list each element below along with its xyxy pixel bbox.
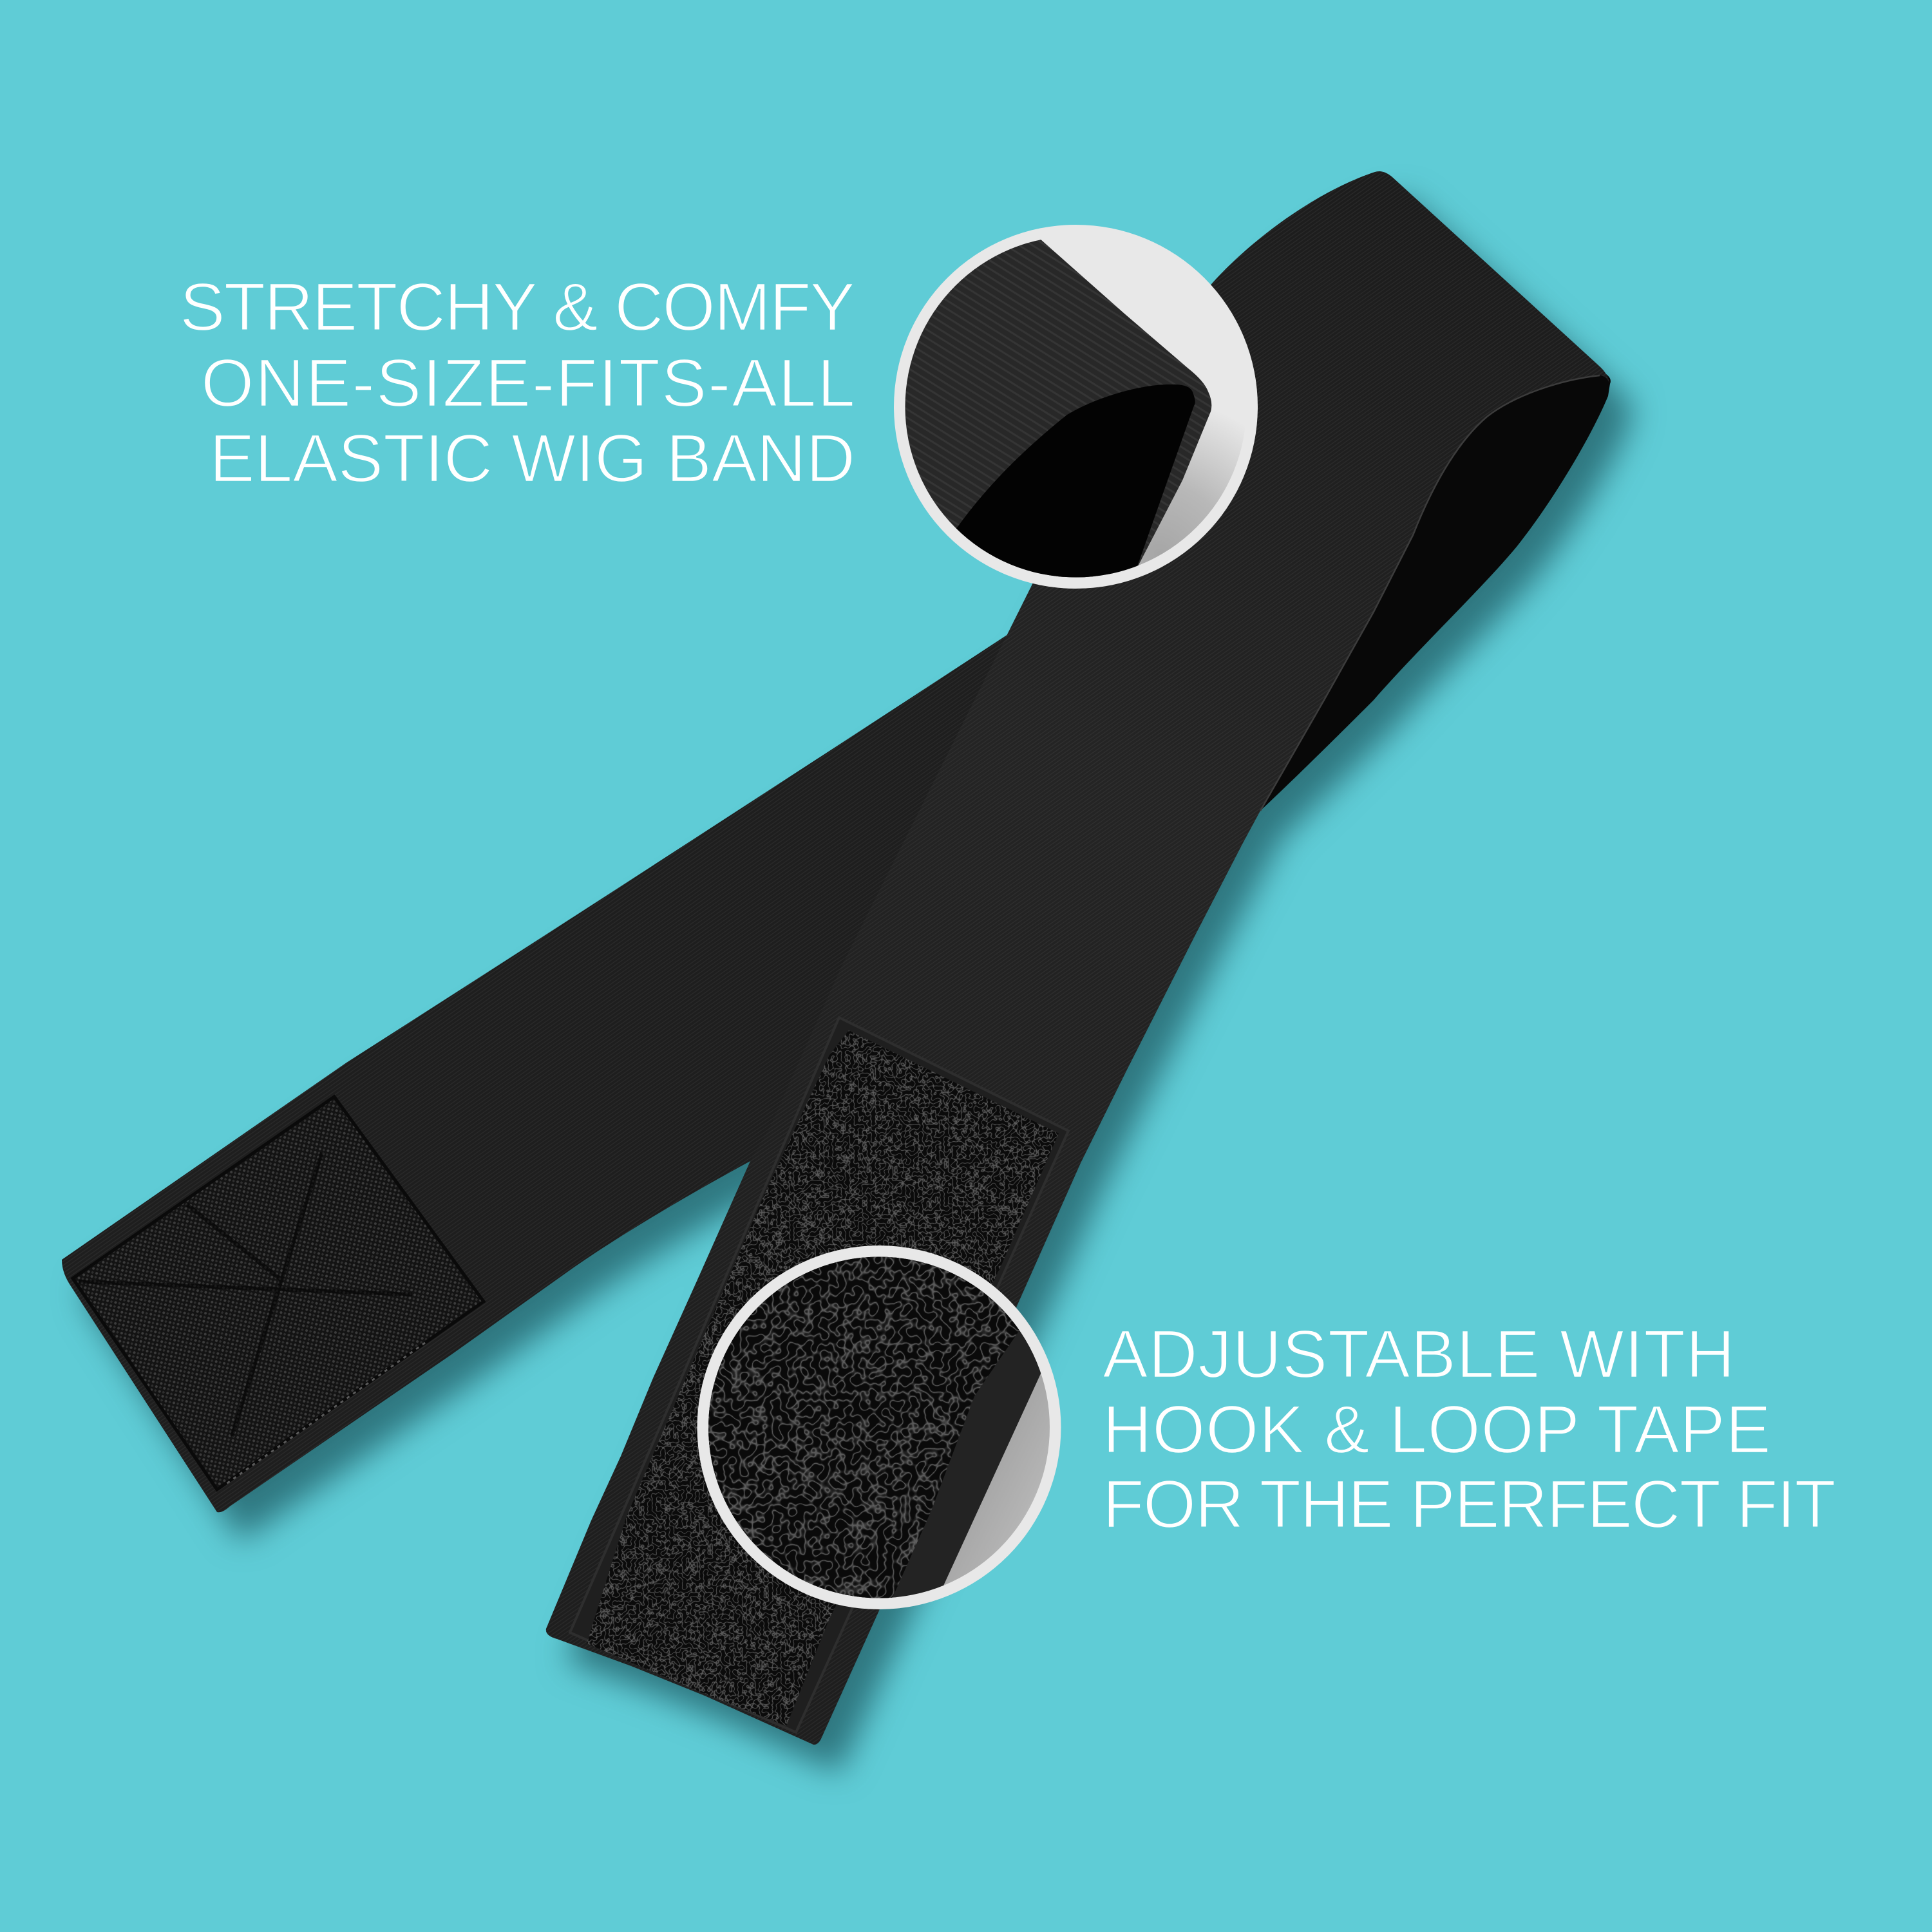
text: stretchy and comfy: ELASTIC WIG BAND [209, 421, 855, 497]
patch: velcro hook tape on the front strap [570, 1018, 1068, 1732]
callout circle: elastic fabric close-up [889, 225, 1258, 618]
band: lower-left strap [62, 626, 1095, 1512]
text: adjustable with hook and loop: FOR THE PERFECT FIT [1103, 1466, 1836, 1542]
text: adjustable with hook and loop: HOOK & LOOP TAPE [1103, 1392, 1771, 1468]
band: inner black back of the loop [1260, 370, 1611, 811]
product: elastic wig band [62, 171, 1611, 1745]
text: stretchy and comfy: ONE-SIZE-FITS-ALL [201, 345, 855, 421]
magnified black inside of the loop [956, 384, 1195, 577]
magnified band edge [708, 1257, 1041, 1598]
magnified velcro texture [708, 1257, 1019, 1598]
callout circle: hook tape close-up [697, 1245, 1061, 1609]
text: adjustable with hook and loop [1103, 1316, 1836, 1542]
text: adjustable with hook and loop: ADJUSTABLE WITH [1103, 1316, 1735, 1392]
text: stretchy and comfy: STRETCHY & COMFY [180, 269, 855, 345]
text: stretchy and comfy [180, 269, 855, 497]
magnified elastic edge [905, 240, 1212, 577]
patch: hook-and-loop backing stitched on the strap [73, 1097, 484, 1490]
band: front strap with folded top [546, 171, 1609, 1745]
